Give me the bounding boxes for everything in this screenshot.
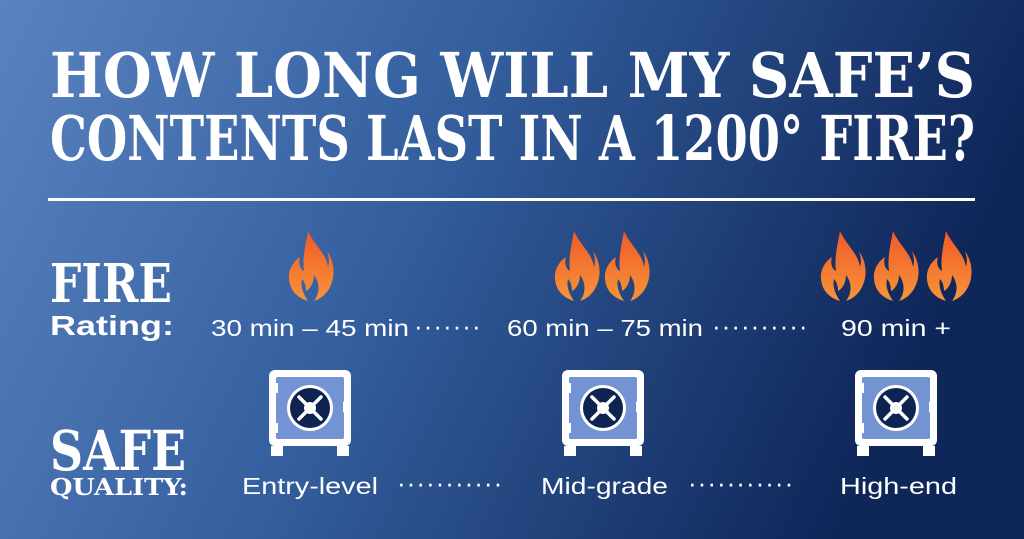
fire rating labels: 30 min – 45 min <box>211 315 409 341</box>
fire rating labels: 90 min + <box>841 315 951 341</box>
safe quality labels: Entry-level <box>242 473 378 499</box>
safe quality labels: ··········· <box>688 468 794 498</box>
heading: safe quality <box>50 418 188 501</box>
safe quality labels <box>242 468 957 499</box>
icon: safes <box>269 370 937 456</box>
heading: fire rating: FIRE <box>50 253 172 315</box>
heading: safe quality: QUALITY: <box>50 474 188 501</box>
heading: fire rating <box>50 253 174 341</box>
fire rating labels: 60 min – 75 min <box>507 315 703 341</box>
fire rating labels <box>211 311 951 341</box>
heading: fire rating: Rating: <box>50 310 174 341</box>
fire rating labels: ······· <box>414 311 482 341</box>
safe quality labels: High-end <box>840 473 957 499</box>
heading: safe quality: SAFE <box>50 418 186 483</box>
icon: flames <box>289 231 972 301</box>
title <box>50 39 975 175</box>
safe quality labels: Mid-grade <box>541 473 668 499</box>
safe quality labels: ··········· <box>397 468 503 498</box>
fire rating labels: ·········· <box>712 311 809 341</box>
